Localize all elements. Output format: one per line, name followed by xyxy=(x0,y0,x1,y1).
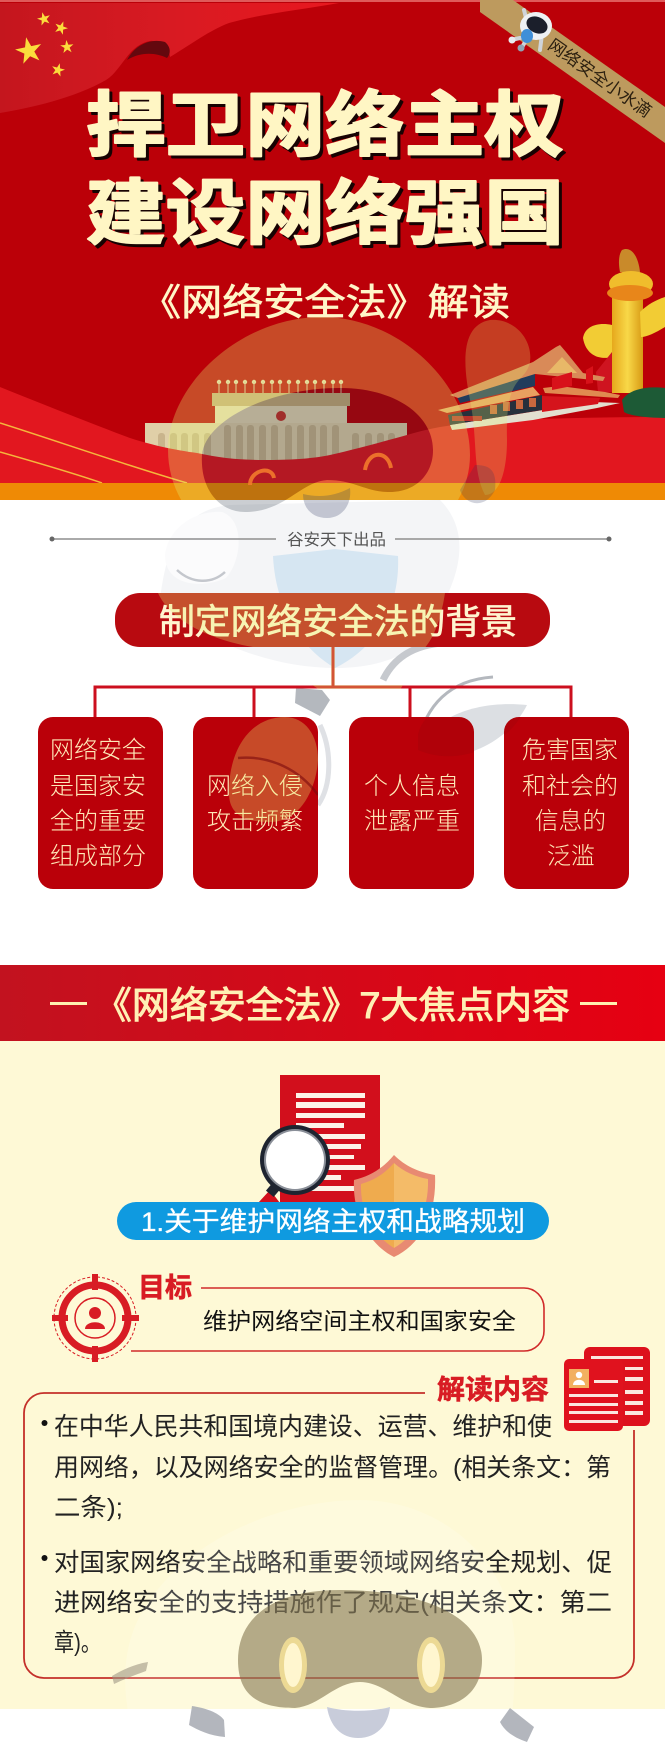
raised arm tint xyxy=(465,320,530,495)
body text: 对国家网络安全战略和重要领域网络安全规划、促 xyxy=(54,1549,612,1577)
panel: 危害国家和社会的信息的泛滥: 信息的 xyxy=(535,808,606,835)
orange stripe xyxy=(0,483,665,500)
grey limb details xyxy=(295,688,330,716)
mouth xyxy=(327,1707,390,1738)
panel: 网络安全是国家安全的重要组成部分 xyxy=(38,717,163,889)
icon: small robot mascot xyxy=(508,10,552,52)
watermark underlayer: robot body on white xyxy=(160,500,527,805)
illustration: Great Hall xyxy=(145,380,407,473)
interpretation panel xyxy=(24,1375,634,1678)
goal box: 维护网络空间主权和国家安全 xyxy=(203,1308,516,1334)
panel: 个人信息泄露严重: 泄露严重 xyxy=(364,808,460,835)
corner ribbon: 网络安全小水滴 xyxy=(480,0,665,143)
panel: 网络入侵攻击频繁 xyxy=(193,717,318,889)
panel: 危害国家和社会的信息的泛滥 xyxy=(504,717,629,889)
body text: 章)。 xyxy=(54,1629,101,1657)
illustration: Huabiao column xyxy=(583,249,665,393)
heading pill: 制定网络安全法的背景: 制定网络安全法的背景 xyxy=(159,603,517,642)
body text: 二条); xyxy=(54,1494,123,1522)
headband and ear fins xyxy=(112,1662,148,1684)
panel: 网络安全是国家安全的重要组成部分: 是国家安 xyxy=(50,773,146,800)
smiling eyes xyxy=(250,455,391,485)
panel: 个人信息泄露严重: 个人信息 xyxy=(364,773,460,800)
panel: 危害国家和社会的信息的泛滥: 危害国家 xyxy=(522,737,618,764)
section band: 7大焦点内容: 《网络安全法》7大焦点内容 xyxy=(94,985,570,1026)
panel: 网络入侵攻击频繁: 网络入侵 xyxy=(207,773,303,800)
body text: 进网络安全的支持措施作了规定(相关条文：第二 xyxy=(54,1589,612,1617)
heading pill: 1.关于维护网络主权和战略规划: 1.关于维护网络主权和战略规划 xyxy=(141,1207,525,1237)
foot tint xyxy=(229,717,318,822)
panel: 危害国家和社会的信息的泛滥: 泛滥 xyxy=(547,843,595,870)
org chart connectors xyxy=(95,647,571,717)
heading pill: 制定网络安全法的背景 xyxy=(115,593,550,647)
panel: 网络安全是国家安全的重要组成部分: 网络安全 xyxy=(50,737,146,764)
divider: 谷安天下出品 xyxy=(50,531,612,549)
title: 建设网络强国 xyxy=(86,175,564,254)
corner ribbon: 网络安全小水滴: 网络安全小水滴 xyxy=(544,35,655,121)
panel: 网络安全是国家安全的重要组成部分: 全的重要 xyxy=(50,808,146,835)
section background: cream xyxy=(0,1041,665,1709)
heading pill: 1.关于维护网络主权和战略规划 xyxy=(117,1202,549,1240)
title xyxy=(86,87,564,254)
warm tint over red areas xyxy=(158,317,530,822)
subtitle: 《网络安全法》解读 xyxy=(140,282,510,323)
title: 捍卫网络主权 xyxy=(86,87,564,166)
body text: 在中华人民共和国境内建设、运营、维护和使 xyxy=(54,1413,552,1441)
panel: 网络入侵攻击频繁: 攻击频繁 xyxy=(207,808,303,835)
ear xyxy=(460,465,495,503)
body text: 用网络，以及网络安全的监督管理。(相关条文：第 xyxy=(54,1454,611,1482)
shield on chest xyxy=(273,549,398,668)
head tint with visor cut-out xyxy=(168,317,470,500)
section band: 7大焦点内容 xyxy=(0,965,665,1041)
visor xyxy=(202,388,433,512)
panel: 网络安全是国家安全的重要组成部分: 组成部分 xyxy=(50,843,146,870)
watermark: large robot, lower xyxy=(112,1500,534,1743)
goal label: 目标: 目标 xyxy=(138,1273,192,1303)
lower red wave with gold lines xyxy=(0,387,665,484)
visor eyes xyxy=(279,1637,307,1693)
icon: red documents xyxy=(564,1347,650,1431)
panel: 个人信息泄露严重 xyxy=(349,717,474,889)
leg tint xyxy=(418,717,520,756)
red flag ribbon xyxy=(0,3,339,113)
goal box xyxy=(131,1288,544,1351)
divider: 谷安天下出品: 谷安天下出品 xyxy=(287,531,386,549)
icon: target with person xyxy=(52,1274,139,1362)
head xyxy=(125,1500,515,1743)
mouth xyxy=(303,488,350,518)
icon: document, magnifier and shield xyxy=(258,1075,435,1257)
hero banner xyxy=(0,0,665,500)
illustration: Tiananmen gate xyxy=(438,345,665,430)
left hand xyxy=(165,512,239,584)
body tint xyxy=(158,593,445,690)
panel: 危害国家和社会的信息的泛滥: 和社会的 xyxy=(522,773,618,800)
interpretation label: 解读内容: 解读内容 xyxy=(437,1375,549,1405)
body text xyxy=(42,1413,612,1657)
watermark: large robot, upper xyxy=(158,317,530,822)
visor xyxy=(238,1590,482,1708)
